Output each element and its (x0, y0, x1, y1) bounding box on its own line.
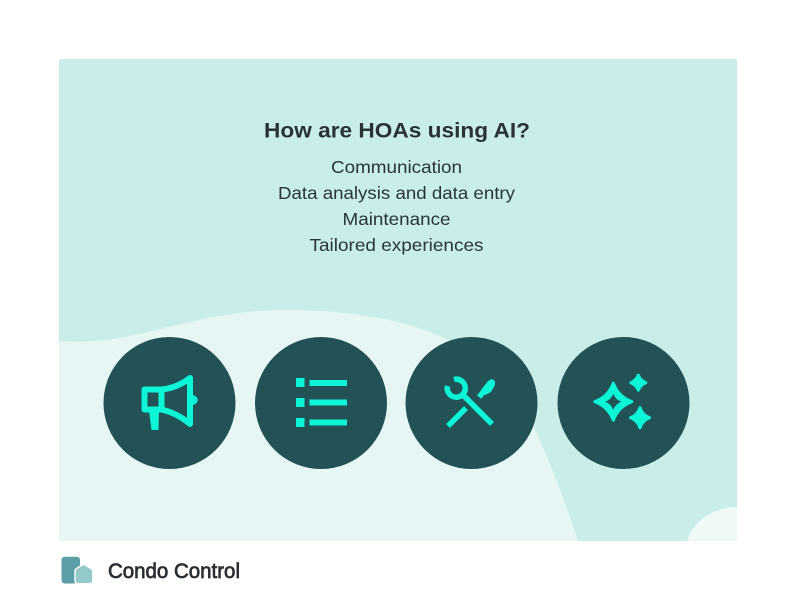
logo: Condo Control (62, 557, 240, 584)
background corner shape (687, 507, 737, 541)
icon: megaphone (104, 337, 236, 469)
logo wordmark: Condo Control (108, 560, 240, 583)
list item: communication: Communication (331, 157, 462, 177)
list item: maintenance: Maintenance (342, 209, 450, 229)
icon: tools (406, 337, 538, 469)
text block: list of AI uses (278, 157, 515, 255)
panel: background (59, 59, 737, 541)
icon: list (255, 337, 387, 469)
icon: sparkles (558, 337, 690, 469)
list item: data analysis: Data analysis and data entry (278, 183, 515, 203)
background wave shape (59, 310, 578, 541)
list item: tailored experiences: Tailored experiences (310, 235, 484, 255)
logo mark (62, 557, 93, 584)
title: How are HOAs using AI? (264, 120, 530, 142)
